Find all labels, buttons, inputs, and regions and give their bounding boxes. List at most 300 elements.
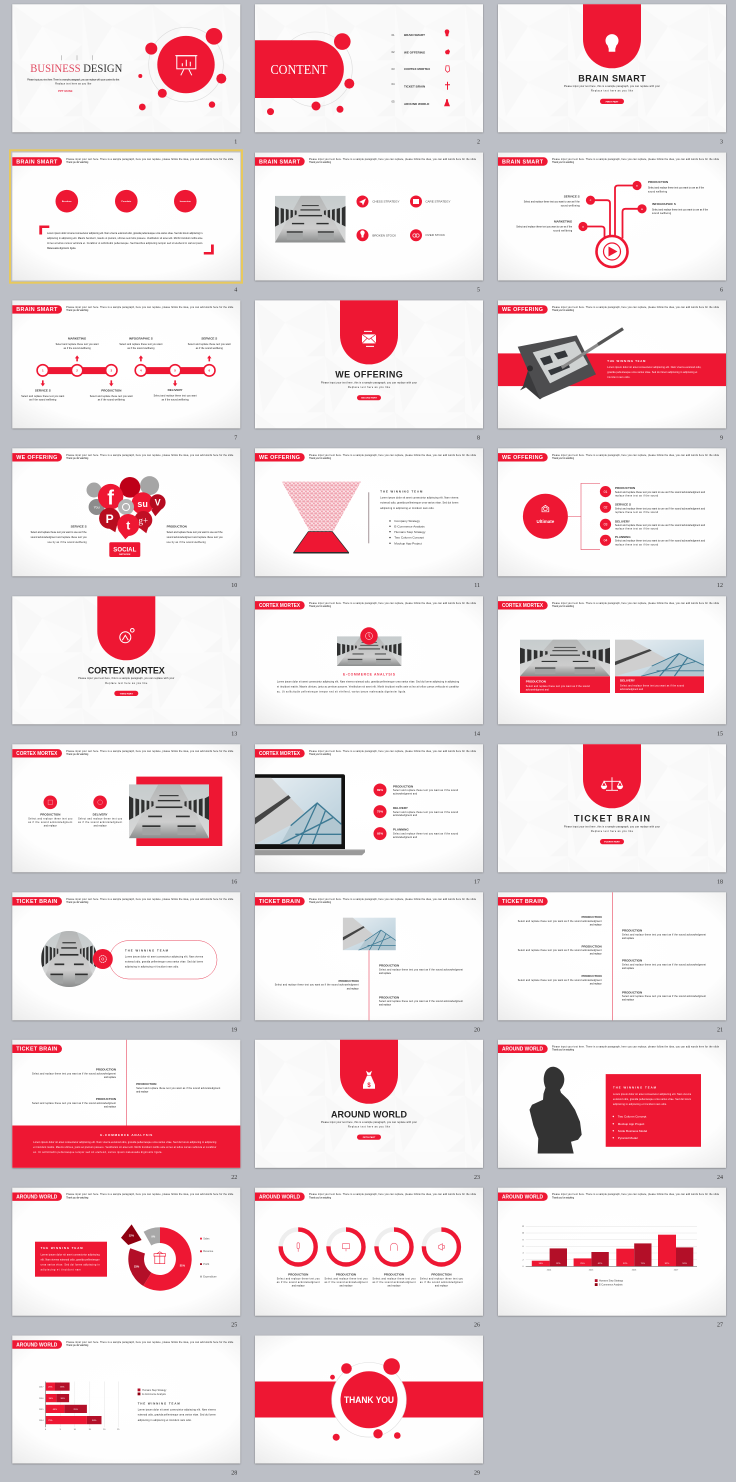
red tab <box>583 744 641 808</box>
bar values: 18% <box>539 1263 543 1265</box>
header text: Thank you for watching <box>66 1196 89 1199</box>
main circle <box>157 36 215 93</box>
slide 20: photo timeline <box>255 892 483 1033</box>
photo: building <box>337 636 402 666</box>
header text: Please input your text here. There is a sample paragraph, here you can replace, please follow the idea, you can add words here for the slide <box>552 1193 720 1196</box>
header tag: WE OFFERING <box>502 455 543 461</box>
red footer <box>12 1126 240 1168</box>
progress rings <box>281 1230 459 1264</box>
header tag <box>12 157 62 166</box>
footer paragraph: ac. Ut sollicitudin pellentesque tempor sed sit eleifend, varius ipsum malesuada dignissim ligula. <box>33 1151 163 1154</box>
header text: Thank you for watching <box>66 901 89 904</box>
axis labels: 2014 <box>39 1420 44 1422</box>
node numbers: 5 <box>174 368 176 372</box>
donut chart <box>121 1224 192 1291</box>
item: delivery: Select and replace these text you <box>78 817 123 820</box>
timeline line <box>125 1040 128 1126</box>
section title: CORTEX MORTEX <box>88 665 165 675</box>
item: production <box>28 813 73 828</box>
lower labels: Select and replace these text you want <box>21 395 65 398</box>
circle labels: Immersion <box>180 201 191 203</box>
slide 26 background <box>255 1188 483 1316</box>
social bubble cluster: V <box>155 497 161 507</box>
timeline items: Select and replace these text you want as if the sound acknowledgment <box>32 1072 116 1075</box>
footer paragraph: et tincidunt mattis. Mauris ultrices, justo ac pretium posuere. Vestibulum sit amet elit. Morbi tincidunt mollis ante at leo at tellus cursus vehicula et curabitur <box>33 1146 217 1149</box>
header text: Please input your text here. There is a sample paragraph, here you can replace, please follow the idea, you can add words here for the slide <box>66 158 234 161</box>
header tag <box>255 1192 305 1201</box>
header text: Thank you for watching <box>309 753 332 756</box>
bar values: 71% <box>641 1263 645 1265</box>
item: planning: PLANNING <box>615 535 631 539</box>
paragraph: adipiscing in adipiscing elit. Mauris hendrerit, mauris ut pretium, ultrices sem felis posuere. Vestibulum sit amet elit. Morbi tincidunt mollis ante. <box>47 237 203 240</box>
header text <box>552 602 720 608</box>
branch nodes: D <box>636 186 638 188</box>
slide 11: icon funnel <box>255 448 483 589</box>
card: delivery: Select and replace these text you want as if the sound <box>620 684 685 687</box>
label: infographics <box>652 202 709 215</box>
page number 27: 27 <box>717 1323 723 1329</box>
axis labels: 25 <box>117 1429 120 1431</box>
strategy labels <box>372 200 451 237</box>
section title: TICKET BRAIN <box>574 814 650 824</box>
red tab <box>583 4 641 68</box>
bar values: 30% <box>49 1398 53 1400</box>
page number 22: 22 <box>231 1175 237 1181</box>
slide 26: four progress rings <box>255 1188 483 1329</box>
header text <box>66 306 234 312</box>
header text <box>552 306 720 312</box>
ring captions: and replace <box>388 1285 401 1288</box>
ring captions: PRODUCTION <box>384 1273 404 1277</box>
red band <box>498 353 726 386</box>
page number 16: 16 <box>231 879 237 885</box>
page number 7: 7 <box>234 435 237 441</box>
strategy labels: CHESS STRATEGY <box>372 200 400 204</box>
legend: Humans Step Strategy <box>599 1279 624 1282</box>
winning team text <box>125 948 204 969</box>
box text: THE WINNING TEAM <box>613 1085 657 1089</box>
divider <box>367 492 370 543</box>
page number 21: 21 <box>717 1027 723 1033</box>
page number 29: 29 <box>474 1470 480 1476</box>
header tag <box>255 601 305 610</box>
slide 2: contents <box>255 4 483 145</box>
item: services <box>615 502 706 514</box>
header text <box>309 1193 477 1199</box>
slide 22 background <box>12 1040 240 1168</box>
play button <box>596 236 628 267</box>
box bullet list <box>613 1114 648 1140</box>
content heading: CONTENT <box>270 63 328 78</box>
item: production <box>615 486 706 498</box>
upper labels: as if the sound wellbeing <box>196 347 224 350</box>
contents list: BRAIN SMART <box>404 33 425 37</box>
bar values: 25% <box>48 1386 53 1388</box>
bubbles <box>138 28 226 110</box>
donut chart: 51% <box>180 1264 186 1268</box>
page number 2: 2 <box>477 139 480 145</box>
slide 4 background <box>12 152 240 280</box>
bullet list: Humans Step Strategy <box>394 530 426 534</box>
upper labels: SERVICE S <box>201 337 217 341</box>
header text: Please input your text here. There is a sample paragraph, here you can replace, please follow the idea, you can add words here for the slide <box>552 454 720 457</box>
page number 9: 9 <box>720 435 723 441</box>
item: production left: and replace <box>347 988 359 991</box>
branch lines <box>583 186 642 240</box>
item: delivery: and replace <box>94 825 107 828</box>
right items <box>622 929 706 1002</box>
red text box: THE WINNING TEAM <box>41 1246 83 1250</box>
label: production: PRODUCTION <box>167 524 187 528</box>
item: delivery <box>78 813 123 828</box>
slide 11 background <box>255 448 483 576</box>
legend: E-Commerce Analysis <box>142 1393 167 1396</box>
branch nodes: C <box>590 200 592 202</box>
lower labels <box>21 388 197 402</box>
label: services: Select and replace these text you want to use as if the <box>524 200 580 204</box>
timeline items: PRODUCTION <box>96 1097 116 1101</box>
circle numbers <box>604 490 607 542</box>
icon: gift <box>154 1252 166 1264</box>
lower labels: SERVICE S <box>35 389 51 393</box>
section description: Please input your text here, this is a sample paragraph, you can replace with your <box>321 1121 417 1124</box>
part button <box>600 99 624 104</box>
slide 8 background <box>255 300 483 428</box>
footer heading: E-COMMERCE ANALYSIS <box>100 1133 152 1137</box>
paragraph <box>47 232 203 250</box>
page number 3: 3 <box>720 139 723 145</box>
red tab <box>340 1040 398 1104</box>
paragraph: Lorem ipsum dolor sit amet consectetur adipiscing elit. Nam viverra euismod odio, gravida pellentesque urna varius vitae. Sed dui lorem adipiscing in. <box>47 232 203 235</box>
slide 22: timeline with red footer <box>12 1040 240 1181</box>
ring captions: as if the sound acknowledgment <box>277 1281 320 1284</box>
axis labels: 5 <box>60 1429 62 1431</box>
social badge: NETWORK <box>119 554 131 556</box>
label: services <box>31 524 87 544</box>
winning team text: Lorem ipsum dolor sit amet consectetur adipiscing elit. Nam viverra <box>380 496 459 499</box>
slide 14: e-commerce photo <box>255 596 483 737</box>
legend: Revenue <box>203 1250 214 1253</box>
slide 15 background <box>498 596 726 724</box>
red text box: Lorem ipsum dolor sit amet consectetur adipiscing <box>41 1253 100 1256</box>
round photo <box>41 931 96 987</box>
bar values: 32% <box>556 1263 561 1265</box>
winning team text <box>607 359 702 379</box>
percentage values: 89% <box>377 788 383 792</box>
contents list <box>392 33 430 106</box>
header text: Please input your text here. There is a sample paragraph, here you can replace, please follow the idea, you can add words here for the slide <box>66 898 234 901</box>
bullet list <box>389 519 426 545</box>
slide 23 background <box>255 1040 483 1168</box>
ring captions: Select and replace these text you <box>277 1278 320 1281</box>
percentage values: 92% <box>377 832 383 836</box>
slide 21 background <box>498 892 726 1020</box>
header text <box>309 454 477 460</box>
bar values: 41% <box>598 1263 602 1265</box>
winning team text: Lorem ipsum dolor sit amet consectetur adipiscing elit. Nam viverra <box>138 1408 216 1412</box>
header tag <box>498 305 548 314</box>
item: production: replace these text as if the sound <box>615 494 659 497</box>
node numbers: 2 <box>76 368 78 372</box>
header text: Please input your text here. There is a sample paragraph, here you can replace, please follow the idea, you can add words here for the slide <box>309 898 477 901</box>
card: production: acknowledgment and <box>526 688 549 691</box>
social bubble cluster: t <box>126 518 130 532</box>
timeline items: and replace <box>104 1076 117 1079</box>
bar values: 70% <box>73 1409 78 1411</box>
laptop <box>255 774 365 855</box>
percentage circles <box>374 784 386 840</box>
timeline items: Select and replace these text you want as if the sound acknowledgment <box>32 1102 116 1105</box>
red box <box>606 1074 701 1147</box>
icon circles <box>356 196 422 241</box>
circle numbers: 03 <box>604 522 607 526</box>
axis labels: 12 <box>522 1226 525 1228</box>
header tag <box>498 601 548 610</box>
header text: Thank you for watching <box>552 457 575 460</box>
card: delivery: acknowledgment and <box>620 688 644 691</box>
header text: Thank you for watching <box>309 605 332 608</box>
axis labels: 15 <box>89 1429 92 1431</box>
chart axis <box>44 1382 47 1427</box>
ultimate circle <box>523 494 568 539</box>
header tag <box>498 1045 548 1053</box>
right items: PRODUCTION <box>622 929 642 933</box>
social bubble cluster: You <box>94 505 100 509</box>
silhouette <box>530 1067 582 1154</box>
left items: and replace <box>590 982 602 985</box>
item: production right 2: Select and replace these text you want as if the sound acknowledgment <box>379 1000 463 1003</box>
paragraph <box>277 680 460 694</box>
contents list: CORTEX MORTEX <box>404 67 430 71</box>
label: production: sound wellbeing <box>648 191 668 193</box>
slide 23: section around world <box>255 1040 483 1181</box>
header tag: CORTEX MORTEX <box>259 603 300 609</box>
page number 14: 14 <box>474 731 480 737</box>
social badge <box>109 542 140 557</box>
item: production: PRODUCTION <box>393 784 413 788</box>
timeline line <box>611 892 614 1020</box>
winning team text: gravida pellentesque urna varius vitae. Sed dui lorem adipiscing in adipiscing et <box>607 371 698 374</box>
bubbles <box>330 1358 401 1441</box>
axis labels: 2015 <box>39 1409 44 1411</box>
header text <box>309 898 477 904</box>
strategy labels: CARE STRATEGY <box>425 200 451 204</box>
box bullet list: Smile Business Model <box>618 1129 648 1133</box>
ring captions: Select and replace these text you <box>324 1278 368 1281</box>
header text <box>552 454 720 460</box>
header text <box>309 602 477 608</box>
label: infographics: sound wellbeing <box>652 213 672 215</box>
slide 21: six item timeline <box>498 892 726 1033</box>
right items: and replace <box>622 999 635 1002</box>
header tag <box>255 897 305 906</box>
contents list: WE OFFERING <box>404 51 426 55</box>
ticks above title <box>62 55 92 60</box>
axis labels <box>522 1226 679 1271</box>
lower labels: PRODUCTION <box>101 389 121 393</box>
circle labels: Percolate <box>121 200 132 203</box>
page number 5: 5 <box>477 288 480 294</box>
photo: building <box>275 196 346 242</box>
section title: BRAIN SMART <box>578 73 646 83</box>
item: delivery <box>615 519 706 530</box>
header text <box>66 898 234 904</box>
axis labels: 4 <box>522 1253 524 1255</box>
photo: glass building <box>343 918 396 950</box>
item: services: replace these text as if the sound <box>615 511 659 514</box>
item: production right 1: and replace <box>379 972 392 975</box>
header text: Thank you for watching <box>309 457 332 460</box>
slide 17 background <box>255 744 483 872</box>
ring captions: and replace <box>435 1285 449 1288</box>
box text: euismod odio, gravida pellentesque urna varius vitae. Sed dui lorem <box>613 1098 691 1101</box>
header text: Please input your text here. There is a sample paragraph, here you can replace, please follow the idea, you can add words here for the slide <box>66 306 234 309</box>
item: delivery: DELIVERY <box>615 519 630 523</box>
slide 12 background <box>498 448 726 576</box>
item: planning <box>615 535 706 546</box>
box bullet list: Pyramid Model <box>618 1136 638 1140</box>
upper labels <box>56 337 231 350</box>
label: infographics: Select and replace these text you want to use as if the <box>652 208 709 212</box>
right items: and replace <box>622 967 635 970</box>
slide 4: three circles <box>12 152 240 294</box>
tablet base <box>293 532 349 554</box>
header text <box>66 158 234 164</box>
slide 29: thank you <box>255 1336 483 1476</box>
ring captions: as if the sound acknowledgment <box>372 1281 416 1284</box>
thank you text: THANK YOU <box>344 1395 394 1405</box>
page number 1: 1 <box>234 139 237 145</box>
item: production right 1: PRODUCTION <box>379 964 399 968</box>
item: delivery: DELIVERY <box>393 806 408 810</box>
item: delivery: replace these text as if the sound <box>615 527 659 530</box>
header tag: AROUND WORLD <box>502 1047 543 1053</box>
page number 24: 24 <box>717 1175 723 1181</box>
winning team text: euismod odio, gravida pellentesque urna varius vitae. Sed dui lorem <box>380 502 458 505</box>
contents list: 03 <box>392 67 395 71</box>
card: production: Select and replace these text you want as if the sound <box>526 685 590 688</box>
footer paragraph: Lorem ipsum dolor sit amet consectetur adipiscing elit. Nam viverra euismod odio, gravida pellentesque urna varius vitae. Sed dui lorem adipiscing in adipiscing <box>33 1141 217 1144</box>
icon: clock person <box>120 628 134 643</box>
header tag: BRAIN SMART <box>16 307 58 313</box>
bracket lines <box>568 483 600 550</box>
icon: light bulb <box>606 34 618 52</box>
header tag: AROUND WORLD <box>16 1194 57 1200</box>
paragraph: et tincidunt mattis. Mauris ultrices, justo ac pretium posuere. Vestibulum sit amet elit. Morbi tincidunt mollis ante at leo at tellus cursus vehicula et curabitur <box>277 685 459 688</box>
section description second line: Replace text here as you like <box>348 1126 391 1129</box>
header text: Please input your text here. There is a sample paragraph, here you can replace, please follow the idea, you can add words here for the slide <box>552 306 720 309</box>
header text: Thank you for watching <box>66 1344 89 1347</box>
percentage values <box>377 788 383 836</box>
header text <box>66 750 234 756</box>
item: delivery: DELIVERY <box>93 813 108 817</box>
header tag: TICKET BRAIN <box>16 1047 57 1053</box>
left items: and replace <box>590 923 602 926</box>
winning team text <box>380 489 459 510</box>
header text: Please input your text here. There is a sample paragraph, here you can replace, please follow the idea, you can add words here for the slide <box>309 750 477 753</box>
part button: FIFTH PART <box>363 1136 376 1139</box>
right items: and replace <box>622 937 635 940</box>
page number 8: 8 <box>477 435 480 441</box>
social bubble cluster <box>86 476 166 539</box>
header tag: CORTEX MORTEX <box>502 603 543 609</box>
section title: AROUND WORLD <box>331 1109 408 1119</box>
header tag <box>255 453 305 462</box>
content pill <box>255 40 344 98</box>
slide 25 background <box>12 1188 240 1316</box>
red band <box>255 1382 483 1418</box>
header tag: CORTEX MORTEX <box>16 751 58 757</box>
part button: SECOND PART <box>361 397 378 400</box>
section description second line: Replace text here as you like <box>348 386 391 389</box>
label: services <box>524 194 580 208</box>
subtitle: Please input your text here. There is a sample paragraph, you can replace with your content for this <box>27 79 120 82</box>
winning team text <box>138 1401 216 1422</box>
title: business design: BUSINESS DESIGN <box>30 63 122 75</box>
icon: scales <box>602 777 622 790</box>
legend <box>595 1279 624 1286</box>
header text: Please input your text here. There is a sample paragraph, here you can replace, please follow the idea, you can add words here for the slide <box>66 1193 234 1196</box>
ring captions: PRODUCTION <box>288 1273 308 1277</box>
winning team text: Lorem ipsum dolor sit amet consectetur adipiscing elit. Nam viverra euismod odio, <box>607 366 702 369</box>
axis labels: 2016 <box>632 1269 637 1271</box>
winning team text: adipiscing in adipiscing et tincidunt nam odio. <box>138 1419 192 1422</box>
page number 4: 4 <box>234 288 237 294</box>
icon: camera <box>542 505 549 512</box>
icon: envelope <box>362 331 376 346</box>
header tag: WE OFFERING <box>259 455 300 461</box>
node numbers: 3 <box>110 368 112 372</box>
header text: Thank you for watching <box>66 161 89 164</box>
item: planning: replace these text as if the sound <box>615 543 659 546</box>
item: production right 1: Select and replace these text you want as if the sound acknowledgment <box>379 968 463 971</box>
left items: PRODUCTION <box>582 915 602 919</box>
page number 12: 12 <box>717 583 723 589</box>
timeline items: and replace <box>136 1090 149 1093</box>
winning team text: THE WINNING TEAM <box>138 1401 180 1405</box>
ring captions <box>277 1273 464 1288</box>
slide 6 background <box>498 152 726 280</box>
ring captions: PRODUCTION <box>431 1273 451 1277</box>
header text: Thank you for watching <box>66 457 89 460</box>
header text: Thank you for watching <box>552 161 575 164</box>
header text: Thank you for watching <box>552 1049 575 1052</box>
page number 6: 6 <box>720 288 723 294</box>
header text: Thank you for watching <box>66 753 89 756</box>
lower labels: as if the sound wellbeing <box>98 399 126 402</box>
winning team text: adipiscing in adipiscing et tincidunt nam odio. <box>380 507 435 510</box>
slide 24: silhouette and red box <box>498 1040 726 1181</box>
slide 25: donut chart <box>12 1188 240 1329</box>
slide 29 background <box>255 1336 483 1464</box>
circle numbers: 04 <box>604 538 607 542</box>
item: delivery: Select and replace these text you want to use as if the sound acknowledgment and <box>615 524 706 527</box>
header tag: AROUND WORLD <box>259 1194 300 1200</box>
page number 25: 25 <box>231 1323 237 1329</box>
slide 27 background <box>498 1188 726 1316</box>
header text: Please input your text here. There is a sample paragraph, here you can replace, please follow the idea, you can add words here for the slide <box>309 454 477 457</box>
item: production left: Select and replace these text you want as if the sound acknowledgment <box>275 984 359 987</box>
label: production <box>648 180 705 193</box>
item: production: as if the sound acknowledgment <box>28 821 73 824</box>
three circles <box>56 190 197 212</box>
slide 14 background <box>255 596 483 724</box>
timeline items: PRODUCTION <box>136 1082 156 1086</box>
part button <box>600 839 624 844</box>
white ring <box>332 1362 406 1437</box>
axis labels: 10 <box>522 1233 525 1235</box>
header text: Please input your text here. There is a sample paragraph, here you can replace, please follow the idea, you can add words here for the slide <box>309 602 477 605</box>
